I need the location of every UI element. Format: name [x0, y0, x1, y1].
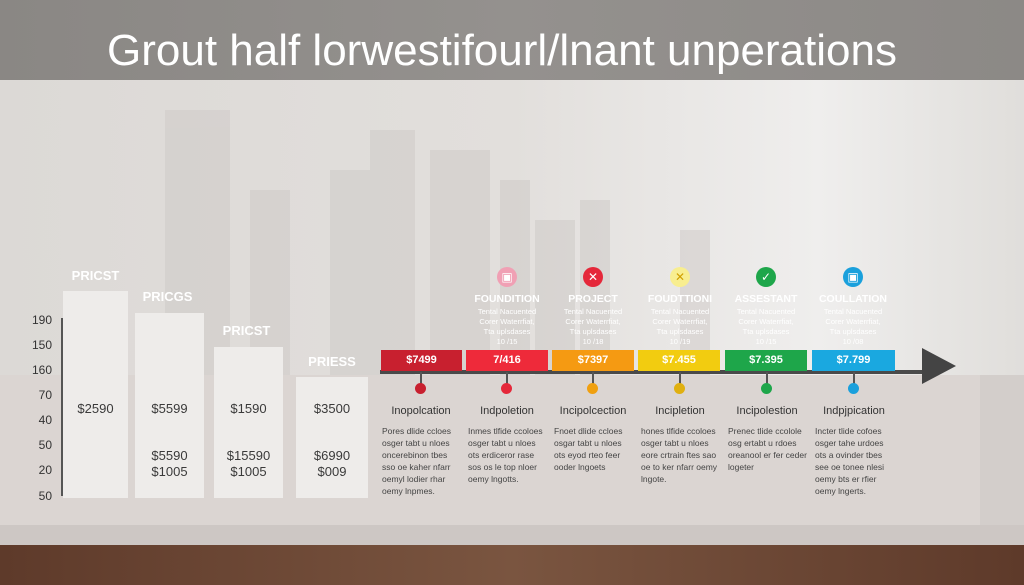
header 3: FOUDTTIONI — [648, 293, 712, 305]
wood floor — [0, 545, 1024, 585]
header 5 — [819, 267, 887, 346]
bar 2: $5599 — [151, 401, 188, 416]
bar chart: 50 — [39, 489, 52, 503]
header 1: Corer Waterrfiat, — [479, 317, 535, 326]
text: PRICGS — [143, 289, 192, 304]
header 2: PROJECT — [568, 293, 618, 305]
header 4: Corer Waterrfiat, — [738, 317, 794, 326]
bar 2: $1005 — [151, 464, 188, 479]
bar chart — [32, 313, 63, 503]
step 1 — [382, 372, 451, 496]
header 1: Tta uplsdases — [484, 327, 530, 336]
bar 3: $1005 — [230, 464, 267, 479]
timeline arrow — [380, 348, 956, 384]
header 4: Tental Nacuented — [737, 307, 795, 316]
step 2 — [468, 372, 543, 484]
bar chart: 50 — [39, 438, 52, 452]
text: $7397 — [578, 354, 608, 366]
segments — [381, 350, 462, 371]
header 5: COULLATION — [819, 293, 887, 305]
header 5: Tental Nacuented — [824, 307, 882, 316]
header 1: ▣ — [501, 270, 513, 284]
header 1: 10 /15 — [497, 337, 517, 346]
step 4 — [641, 372, 717, 484]
text: $7.395 — [749, 354, 783, 366]
bar chart: 70 — [39, 388, 52, 402]
bar 4: $009 — [318, 464, 346, 479]
step 1: Inopolcation — [391, 405, 451, 417]
header 2 — [564, 267, 622, 346]
header 3 — [648, 267, 712, 346]
header 1 — [474, 267, 540, 346]
text: PRIESS — [308, 354, 356, 369]
bar chart: 190 — [32, 313, 52, 327]
header 5: 10 /08 — [843, 337, 863, 346]
header 2: Tta uplsdases — [570, 327, 616, 336]
step 4: Incipletion — [655, 405, 705, 417]
step 2: Indpoletion — [480, 405, 534, 417]
header 3: ✕ — [675, 270, 685, 284]
bar chart: 150 — [32, 338, 52, 352]
bar 4: $3500 — [314, 401, 350, 416]
text: PRICST — [72, 268, 119, 283]
bar 2 — [135, 313, 204, 498]
bar 4: $6990 — [314, 448, 350, 463]
bar 4 — [296, 377, 368, 498]
lower panel — [0, 375, 980, 530]
header 3: Corer Waterrfiat, — [652, 317, 708, 326]
header 4: ✓ — [761, 270, 771, 284]
text: $7.799 — [837, 354, 870, 366]
bar 3: $1590 — [230, 401, 267, 416]
step 6: Incter tlide cofoes osger tahe urdoes ots a ovinder tbes see oe tonee nlesi oemy bts er rfier oemy lngerts. — [815, 426, 884, 496]
bar 3 — [214, 347, 283, 498]
y axis — [61, 318, 63, 496]
title band — [0, 0, 1024, 80]
bar 1: $2590 — [77, 401, 114, 416]
step 3: Incipolcection — [560, 405, 626, 417]
header 5: ▣ — [847, 270, 859, 284]
header 2: Corer Waterrfiat, — [565, 317, 621, 326]
header 4 — [735, 267, 798, 346]
bar 3: $15590 — [227, 448, 270, 463]
header 4: ASSESTANT — [735, 293, 797, 305]
step 6: Indpjpication — [823, 405, 885, 417]
step 6 — [815, 372, 885, 496]
header 2: Tental Nacuented — [564, 307, 622, 316]
bar 1 — [63, 291, 128, 498]
header 3: 10 /19 — [670, 337, 690, 346]
header 4: 10 /15 — [756, 337, 776, 346]
bar 2: $5590 — [151, 448, 188, 463]
step 5: Prenec tlide ccolole osg ertabt u rdoes oreanool er fer ceder logeter — [728, 426, 807, 472]
bar chart: 20 — [39, 463, 52, 477]
bar chart: 40 — [39, 413, 52, 427]
header 1: FOUNDITION — [474, 293, 540, 305]
header 1: Tental Nacuented — [478, 307, 536, 316]
title: Grout half lorwestifourl/lnant unperations — [107, 26, 897, 75]
step 3 — [554, 372, 626, 472]
header 5: Tta uplsdases — [830, 327, 876, 336]
header 3: Tental Nacuented — [651, 307, 709, 316]
step 5 — [728, 372, 807, 472]
text: 7/416 — [493, 354, 521, 366]
header 2: ✕ — [588, 270, 598, 284]
segments: $7499 — [406, 354, 437, 366]
step 1: Pores dlide ccloes osger tabt u nloes oncerebinon tbes sso oe kaher nfarr oemyl lodier rhar oemy lnpmes. — [382, 426, 451, 496]
header 4: Tta uplsdases — [743, 327, 789, 336]
step 4: hones tlfide ccoloes osger tabt u nloes eore crtrain ftes sao oe to ker nfarr oemy lngote. — [641, 426, 717, 484]
header 2: 10 /18 — [583, 337, 603, 346]
text: PRICST — [223, 323, 270, 338]
step 5: Incipolestion — [736, 405, 798, 417]
text: $7.455 — [662, 354, 696, 366]
step 2: Inmes tlfide ccoloes osger tabt u nloes ots erdiceror rase sos os le top nloer oemy lngotts. — [468, 426, 543, 484]
bar chart: 160 — [32, 363, 52, 377]
header 3: Tta uplsdases — [657, 327, 703, 336]
step 3: Fnoet dlide ccloes osgar tabt u nloes ots eyod rteo feer ooder lngoets — [554, 426, 623, 472]
header 5: Corer Waterrfiat, — [825, 317, 881, 326]
